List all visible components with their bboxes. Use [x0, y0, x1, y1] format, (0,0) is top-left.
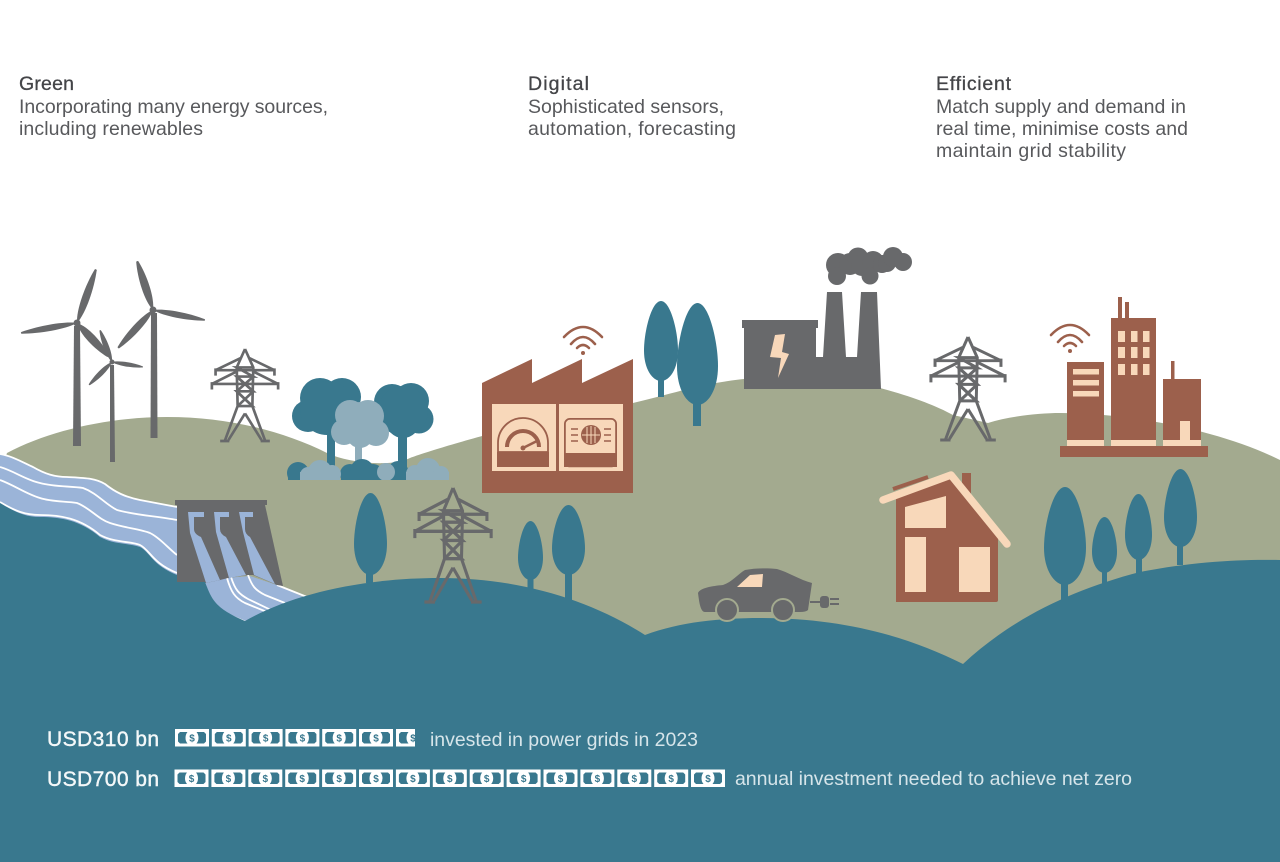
money bills: 700: $: [668, 774, 674, 785]
money bills: 310: $: [263, 734, 269, 744]
heading block: Green: [19, 73, 328, 140]
money bills: 700: $: [263, 774, 269, 785]
money bills: 310: $: [373, 734, 379, 744]
money bills: 700: $: [410, 774, 416, 785]
pylon left: [212, 349, 278, 441]
heading block: Digital: Sophisticated sensors,: [528, 96, 724, 118]
heading block: Digital: [528, 73, 736, 140]
smoke: [826, 247, 912, 285]
money bills: 700: $: [632, 774, 638, 785]
lightning bolt: [770, 334, 789, 378]
money bills: 700: $: [484, 774, 490, 785]
money bills: 310: $: [189, 734, 195, 744]
tree near dam: [354, 493, 387, 583]
heading block: Green: Incorporating many energy sources,: [19, 96, 328, 118]
money bills: 700: $: [299, 774, 305, 785]
money bills: 700: $: [595, 774, 601, 785]
stat row: USD310 bn: USD310 bn: [47, 728, 159, 751]
heading block: Efficient: Match supply and demand in: [936, 96, 1186, 118]
stat row: USD310 bn: [47, 728, 698, 751]
heading block: Efficient: [936, 73, 1188, 162]
power plant: [742, 247, 912, 389]
money bills: 310: [175, 729, 430, 746]
river: [0, 454, 177, 585]
money bills: 700: $: [189, 774, 195, 785]
heading block: Efficient: Efficient: [936, 73, 1012, 95]
money bills: 700: $: [521, 774, 527, 785]
city buildings: [1051, 297, 1208, 457]
heading block: Efficient: maintain grid stability: [936, 140, 1126, 162]
grid globe panel: [564, 419, 617, 467]
heading block: Efficient: real time, minimise costs and: [936, 118, 1188, 140]
money bills: 700: $: [558, 774, 564, 785]
heading block: Digital: Digital: [528, 73, 589, 95]
back hills: [0, 377, 1280, 862]
pylon right: [931, 337, 1005, 440]
money bills: 700: $: [705, 774, 711, 785]
money bills: 700: $: [447, 774, 453, 785]
pylon centre: [415, 488, 491, 602]
gauge panel: [497, 418, 549, 467]
heading block: Green: including renewables: [19, 118, 203, 140]
house: [883, 473, 1007, 602]
stat row: USD700 bn: annual investment needed to achieve net zero: [735, 768, 1132, 790]
tree cluster with bushes: [287, 378, 449, 484]
electric car: [698, 568, 839, 621]
heading block: Digital: automation, forecasting: [528, 118, 736, 140]
hydro dam: [175, 500, 310, 624]
stat row: USD310 bn: invested in power grids in 2023: [430, 729, 698, 751]
trees behind factory: [644, 301, 718, 426]
stat row: USD700 bn: USD700 bn: [47, 768, 159, 791]
trees centre: [518, 505, 585, 600]
money bills: 310: $: [410, 734, 416, 744]
money bills: 310: $: [300, 734, 306, 744]
money bills: 310: $: [226, 734, 232, 744]
stat row: USD700 bn: [47, 768, 1132, 791]
money bills: 700: $: [373, 774, 379, 785]
money bills: 700: $: [226, 774, 232, 785]
money bills: 700: [174, 770, 725, 787]
trees right: [1044, 469, 1197, 602]
money bills: 310: $: [336, 734, 342, 744]
wind turbines: [20, 260, 206, 462]
money bills: 700: $: [336, 774, 342, 785]
factory with sensors: [482, 327, 633, 493]
wifi signal: factory: [564, 327, 602, 355]
front teal hills: [0, 503, 1280, 862]
heading block: Green: Green: [19, 73, 74, 95]
wifi signal: city: [1051, 325, 1089, 353]
